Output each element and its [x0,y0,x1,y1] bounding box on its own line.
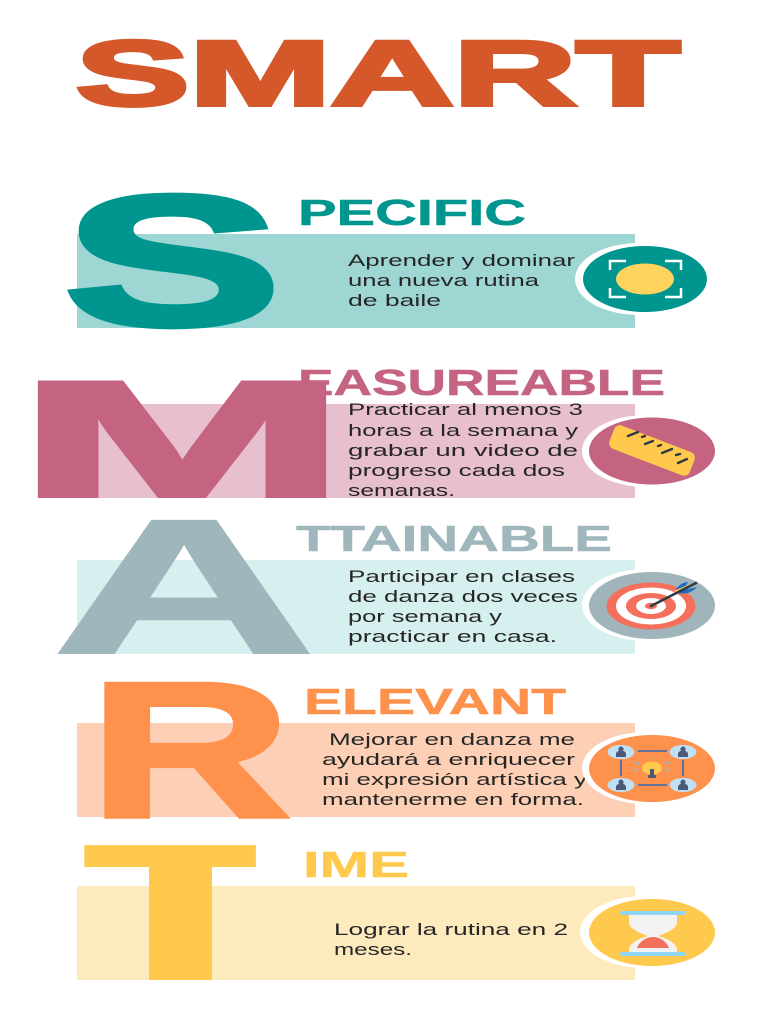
letter A: A [51,479,317,694]
text: specific description: de baile [348,292,441,310]
band: specific [77,234,635,328]
band: attainable [77,560,635,654]
panel: relevant [77,642,715,859]
text: relevant description: mantenerme en forma. [322,791,584,809]
text: time description [334,921,568,959]
band: measureable [77,404,635,498]
text: measureable description [348,401,583,500]
text: relevant description: mi expresión artística y [322,771,588,789]
letter R: R [88,642,292,859]
text: relevant description: ayudará a enriquecer [322,751,576,769]
text: specific description [348,252,576,310]
text: attainable description: por semana y [348,608,503,626]
letter M: M [16,347,348,531]
text: time description: meses. [334,941,412,959]
text: specific description: una nueva rutina [348,272,540,290]
letter T [81,803,259,1022]
text: measureable description: semanas. [348,482,455,500]
text: measureable description: Practicar al menos 3 [348,401,583,419]
letter S: S [63,158,282,365]
text: attainable description: practicar en casa. [348,628,557,646]
panel: specific [63,158,707,365]
heading: ttainable: TTAINABLE [296,518,612,559]
panel: measureable [16,347,715,531]
icon: hourglass [580,896,715,968]
text: attainable description [348,568,578,646]
icon: target [582,569,715,641]
text: measureable description: grabar un video de [348,442,578,460]
panel: attainable [51,479,715,694]
text: attainable description: de danza dos veces [348,588,578,606]
heading: easureable: EASUREABLE [298,362,665,403]
heading: ime: IME [303,844,409,885]
text: measureable description: horas a la semana y [348,422,579,440]
band: time [77,886,635,980]
text: relevant description: Mejorar en danza me [329,731,575,749]
heading: elevant: ELEVANT [304,681,566,722]
text: relevant description [322,731,588,809]
icon: idea network [582,732,715,804]
text: measureable description: progreso cada dos [348,462,565,480]
letter T: T [81,803,259,1022]
title: SMART [76,23,680,125]
panel: time [77,803,715,1022]
heading: pecific: PECIFIC [298,192,526,233]
icon: ruler [582,415,715,487]
text: attainable description: Participar en clases [348,568,575,586]
text: time description: Lograr la rutina en 2 [334,921,568,939]
text: specific description: Aprender y dominar [348,252,576,270]
icon: focus [575,243,707,315]
band: relevant [77,723,635,817]
